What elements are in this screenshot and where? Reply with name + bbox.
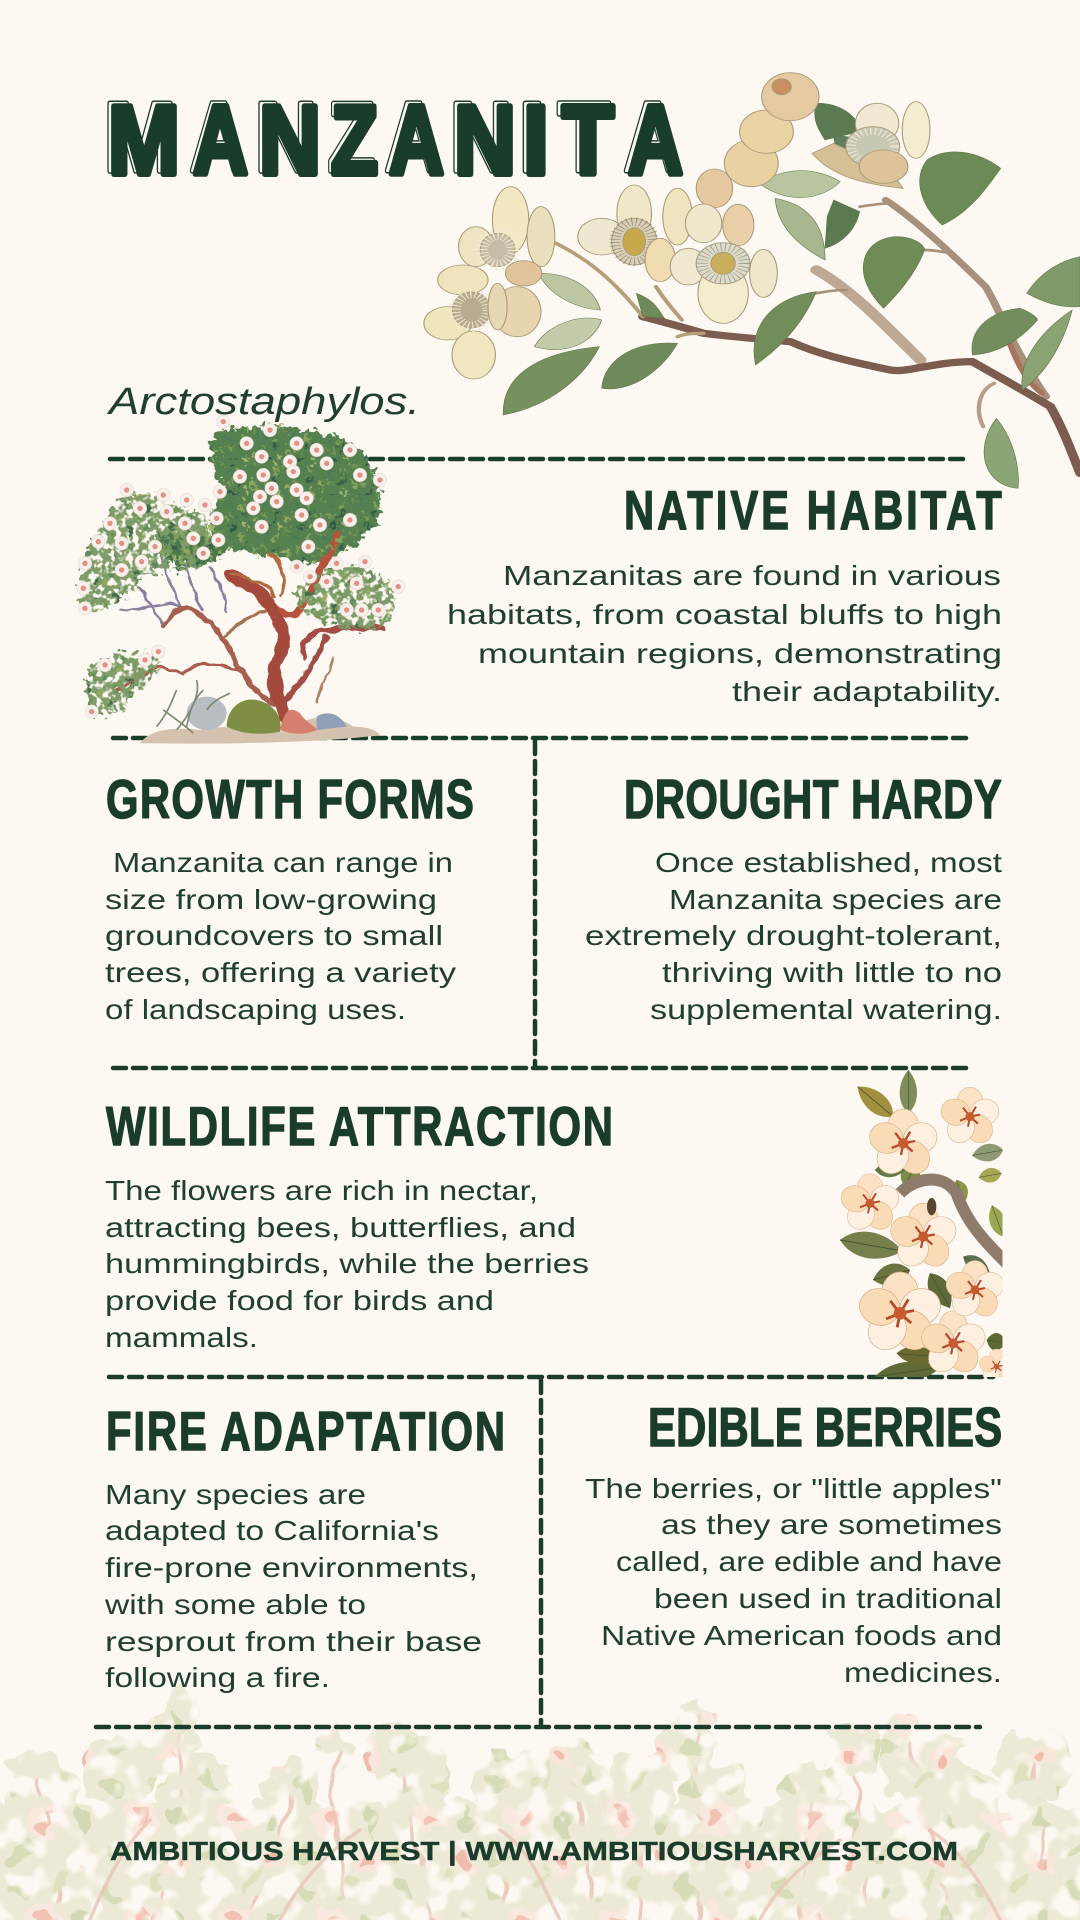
- divider line under native habitat: [113, 736, 967, 740]
- flower upper left: [459, 187, 555, 286]
- flower middle: [578, 185, 692, 282]
- heading: native habitat: NATIVE HABITAT: [624, 481, 1002, 541]
- text block: wildlife attraction: The flowers are rich in nectar,: [105, 1175, 538, 1206]
- title: MANZANITA: N: [255, 82, 317, 192]
- text block: wildlife attraction: mammals.: [105, 1322, 258, 1353]
- text block: growth forms: size from low-growing: [105, 884, 437, 915]
- title: MANZANITA: M: [104, 82, 176, 192]
- title: MANZANITA: A: [190, 82, 247, 192]
- title: MANZANITA: N: [259, 85, 321, 195]
- text block: drought hardy: extremely drought-tolerant,: [585, 920, 1002, 951]
- text block: native habitat: Manzanitas are found in various: [503, 560, 1001, 591]
- text block: edible berries: as they are sometimes: [661, 1509, 1002, 1540]
- title: MANZANITA: M: [108, 85, 180, 195]
- bud cluster: [724, 73, 819, 187]
- title: MANZANITA: A: [624, 82, 681, 192]
- title: MANZANITA: M: [104, 82, 176, 192]
- title: MANZANITA: I: [519, 82, 545, 192]
- vertical divider: growth and drought: [533, 741, 537, 1066]
- illustration: manzanita tree: [77, 415, 405, 744]
- heading: fire adaptation: FIRE ADAPTATION: [106, 1402, 505, 1462]
- text block: fire adaptation: following a fire.: [105, 1662, 330, 1693]
- text block: edible berries: [585, 1473, 1002, 1688]
- heading: growth forms: GROWTH FORMS: [106, 770, 474, 830]
- title: MANZANITA: A: [624, 82, 681, 192]
- text block: drought hardy: Manzanita species are: [669, 884, 1002, 915]
- text block: wildlife attraction: hummingbirds, while the berries: [105, 1248, 589, 1279]
- text block: edible berries: The berries, or "little apples": [585, 1473, 1002, 1504]
- text block: edible berries: called, are edible and have: [616, 1546, 1002, 1577]
- divider line above wildlife: [113, 1066, 967, 1070]
- vertical divider: fire and berries: [539, 1380, 543, 1724]
- divider line below wildlife: [109, 1375, 993, 1379]
- text block: growth forms: Manzanita can range in: [113, 847, 453, 878]
- title: MANZANITA: Z: [328, 82, 375, 192]
- text block: drought hardy: Once established, most: [655, 847, 1002, 878]
- title: MANZANITA: N: [255, 82, 317, 192]
- title: MANZANITA: A: [190, 82, 247, 192]
- title: MANZANITA: A: [389, 85, 444, 195]
- title: MANZANITA: N: [454, 85, 516, 195]
- illustration: peach blossoms with bee: [840, 1070, 1002, 1377]
- blossoms: [869, 1108, 938, 1174]
- text block: fire adaptation: [104, 1479, 482, 1693]
- text block: wildlife attraction: attracting bees, butterflies, and: [105, 1212, 576, 1243]
- text block: growth forms: trees, offering a variety: [105, 957, 456, 988]
- text block: native habitat: habitats, from coastal bluffs to high: [447, 599, 1002, 630]
- text block: fire adaptation: Many species are: [105, 1479, 366, 1510]
- subtitle: Arctostaphylos: Arctostaphylos.: [107, 381, 420, 423]
- divider line under title: [110, 457, 964, 461]
- heading: wildlife attraction: WILDLIFE ATTRACTION: [106, 1097, 613, 1157]
- text block: native habitat: [447, 560, 1002, 707]
- text block: fire adaptation: fire-prone environments,: [105, 1552, 478, 1583]
- heading: drought hardy: DROUGHT HARDY: [624, 770, 1002, 830]
- footer: AMBITIOUS HARVEST | WWW.AMBITIOUSHARVEST.COM: [110, 1836, 958, 1866]
- bee: [927, 1198, 936, 1215]
- title: MANZANITA: [104, 82, 683, 195]
- trunk and branches: [117, 533, 383, 727]
- text block: fire adaptation: adapted to California's: [105, 1515, 439, 1546]
- text block: growth forms: [105, 847, 456, 1025]
- title: MANZANITA: A: [385, 82, 442, 192]
- title: MANZANITA: N: [450, 82, 512, 192]
- leaves behind: [838, 1070, 1011, 1387]
- title: MANZANITA: A: [628, 85, 683, 195]
- text block: drought hardy: supplemental watering.: [650, 994, 1002, 1025]
- text block: wildlife attraction: provide food for birds and: [105, 1285, 494, 1316]
- background flowering shrubs strip: [0, 1692, 1080, 1920]
- text block: drought hardy: thriving with little to no: [662, 957, 1002, 988]
- heading: edible berries: EDIBLE BERRIES: [648, 1398, 1002, 1458]
- text block: wildlife attraction: [105, 1175, 589, 1353]
- text block: native habitat: their adaptability.: [732, 676, 1002, 707]
- canopy base: [157, 426, 380, 567]
- text block: fire adaptation: resprout from their base: [105, 1626, 482, 1657]
- divider line above footer: [96, 1725, 980, 1729]
- title: MANZANITA: Z: [331, 85, 378, 195]
- text block: growth forms: of landscaping uses.: [105, 994, 406, 1025]
- title: MANZANITA: A: [385, 82, 442, 192]
- illustration: flowering manzanita branch: [424, 73, 1080, 488]
- title: MANZANITA: T: [558, 82, 610, 192]
- title: MANZANITA: T: [562, 85, 614, 195]
- rocks, grass and bush at base: [140, 680, 380, 744]
- flower upper right: [812, 102, 930, 188]
- branch: [900, 1180, 1007, 1263]
- title: MANZANITA: T: [558, 82, 610, 192]
- flower center: [670, 169, 777, 323]
- text block: drought hardy: [585, 847, 1002, 1025]
- title: MANZANITA: A: [193, 85, 248, 195]
- title: MANZANITA: I: [523, 85, 549, 195]
- title: MANZANITA: I: [519, 82, 545, 192]
- title: MANZANITA: Z: [328, 82, 375, 192]
- text block: edible berries: Native American foods and: [601, 1620, 1002, 1651]
- text block: native habitat: mountain regions, demonstrating: [478, 638, 1002, 669]
- text block: edible berries: been used in traditional: [654, 1583, 1002, 1614]
- text block: edible berries: medicines.: [844, 1657, 1002, 1688]
- branches: [556, 200, 1080, 473]
- flower lower left: [424, 265, 541, 379]
- text block: growth forms: groundcovers to small: [105, 920, 443, 951]
- title: MANZANITA: N: [450, 82, 512, 192]
- flowers and buds: [424, 73, 930, 379]
- text block: fire adaptation: with some able to: [104, 1589, 366, 1620]
- foliage: [80, 426, 395, 716]
- leaves: [503, 103, 1080, 488]
- blossoms: [77, 415, 405, 718]
